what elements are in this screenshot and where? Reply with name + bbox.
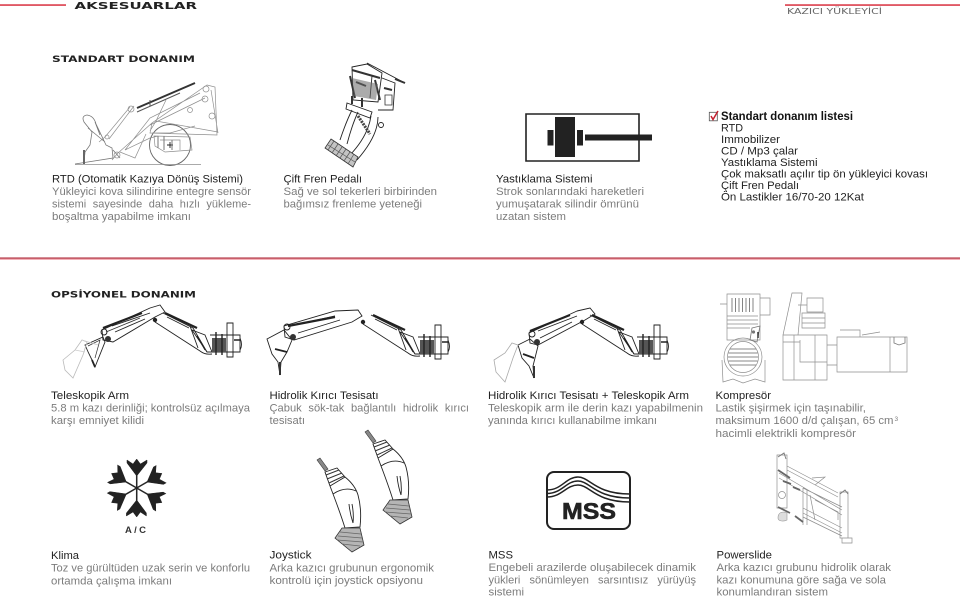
text: RTD bbox=[52, 174, 251, 223]
heading: standard equipment: STANDART DONANIM bbox=[52, 55, 195, 65]
text: cushioning system bbox=[496, 174, 644, 223]
text: breaker plus telescopic arm: Hidrolik Kırıcı Tesisatı + Teleskopik Arm bbox=[488, 390, 689, 402]
text: double brake pedal: Çift Fren Pedalı bbox=[284, 174, 362, 186]
list: standard equipment: RTD bbox=[721, 122, 743, 134]
icon: RTD loader arm drawing bbox=[75, 83, 218, 166]
text: air conditioning bbox=[51, 550, 250, 587]
text: RTD: sistemi sayesinde daha hızlı yükleme- bbox=[52, 198, 251, 210]
heading: optional equipment: OPSİYONEL DONANIM bbox=[51, 290, 196, 300]
text: compressor: Kompresör bbox=[716, 390, 771, 402]
header: left red rule and page title: AKSESUARLAR bbox=[74, 1, 197, 12]
text: cushioning system: Strok sonlarındaki hareketleri bbox=[496, 186, 644, 198]
text: powerslide bbox=[716, 550, 892, 598]
text: MSS: MSS bbox=[488, 550, 513, 562]
text: MSS bbox=[488, 550, 697, 598]
text: double brake pedal: bağımsız frenleme yeteneği bbox=[284, 198, 422, 210]
text: powerslide: Arka kazıcı grubunu hidrolik olarak bbox=[716, 562, 892, 574]
illustration: breaker plus telescopic arm bbox=[494, 308, 668, 382]
illustration: powerslide bbox=[777, 453, 852, 543]
text: compressor: hacimli elektrikli kompresör bbox=[716, 428, 856, 440]
text: telescopic arm bbox=[51, 390, 251, 427]
icon: MSS logo bbox=[547, 472, 630, 529]
text: joystick: kontrolü için joystick opsiyonu bbox=[270, 575, 423, 587]
text: breaker plus telescopic arm: yanında kırıcı kullanabilme imkanı bbox=[488, 415, 657, 427]
text: RTD: Yükleyici kova silindirine entegre sensör bbox=[52, 186, 251, 198]
header: right red rule and section name: KAZICI YÜKLEYİCİ bbox=[787, 6, 882, 16]
text: air conditioning: Klima bbox=[51, 550, 80, 562]
illustration: telescopic arm bbox=[63, 305, 242, 378]
text: breaker plus telescopic arm bbox=[488, 390, 703, 427]
illustration: compressor bbox=[720, 293, 907, 383]
list: standard equipment: Çok maksatlı açılır tip ön yükleyici kovası bbox=[721, 168, 928, 180]
text: compressor bbox=[716, 390, 898, 440]
text: hydraulic breaker line bbox=[270, 390, 469, 427]
icon: red checkbox bbox=[709, 111, 718, 121]
text: cushioning system: uzatan sistem bbox=[496, 211, 566, 223]
text: RTD: RTD (Otomatik Kazıya Dönüş Sistemi) bbox=[52, 174, 243, 186]
list: standard equipment: Çift Fren Pedalı bbox=[721, 180, 799, 192]
list: standard equipment: Standart donanım listesi bbox=[721, 111, 853, 123]
text: hydraulic breaker line: Çabuk sök-tak bağlantılı hidrolik kırıcı bbox=[270, 403, 469, 415]
text: compressor: Lastik şişirmek için taşınabilir, bbox=[716, 403, 866, 415]
section divider: red rule bbox=[0, 258, 960, 260]
text: breaker plus telescopic arm: Teleskopik arm ile derin kazı yapabilmenin bbox=[488, 403, 703, 415]
text: MSS: yükleri sönümleyen sarsıntısız yürüyüş bbox=[488, 574, 696, 586]
text: hydraulic breaker line: tesisatı bbox=[270, 415, 305, 427]
icon: air conditioning snowflake bbox=[106, 459, 167, 536]
illustration: hydraulic breaker line bbox=[267, 310, 450, 375]
text: air conditioning: Toz ve gürültüden uzak serin ve konforlu bbox=[51, 563, 250, 575]
text: powerslide: kazı konumuna göre sağa ve sola bbox=[716, 574, 887, 586]
text: telescopic arm: 5.8 m kazı derinliği; kontrolsüz açılmaya bbox=[51, 403, 251, 415]
text: joystick: Joystick bbox=[270, 550, 312, 562]
icon: double brake pedal bbox=[325, 63, 405, 167]
text: compressor: maksimum 1600 d/d çalışan, 65 cm bbox=[716, 415, 894, 427]
text: joystick: Arka kazıcı grubunun ergonomik bbox=[270, 562, 435, 574]
list: standard equipment bbox=[721, 111, 928, 203]
icon: cushioning cylinder bbox=[526, 114, 652, 161]
text: powerslide: Powerslide bbox=[716, 550, 772, 562]
text: compressor: 3 bbox=[894, 416, 898, 423]
text: RTD: boşaltma yapabilme imkanı bbox=[52, 211, 191, 223]
icon: MSS logo: MSS bbox=[562, 498, 616, 524]
icon: two joysticks bbox=[317, 430, 412, 552]
text: telescopic arm: Teleskopik Arm bbox=[51, 390, 129, 402]
text: double brake pedal bbox=[284, 174, 437, 210]
text: joystick bbox=[270, 550, 435, 587]
text: telescopic arm: karşı emniyet kilidi bbox=[51, 415, 144, 427]
text: double brake pedal: Sağ ve sol tekerleri birbirinden bbox=[284, 186, 437, 198]
list: standard equipment: Ön Lastikler 16/70-20 12Kat bbox=[721, 191, 864, 203]
list: standard equipment: Yastıklama Sistemi bbox=[721, 157, 818, 169]
text: MSS: Engebeli arazilerde oluşabilecek dinamik bbox=[488, 562, 697, 574]
list: standard equipment: Immobilizer bbox=[721, 134, 780, 146]
text: air conditioning: ortamda çalışma imkanı bbox=[51, 575, 172, 587]
list: standard equipment: CD / Mp3 çalar bbox=[721, 145, 798, 157]
text: hydraulic breaker line: Hidrolik Kırıcı Tesisatı bbox=[270, 390, 378, 402]
text: cushioning system: Yastıklama Sistemi bbox=[496, 174, 592, 186]
text: cushioning system: yumuşatarak silindir ömrünü bbox=[496, 198, 639, 210]
icon: air conditioning snowflake: A/C bbox=[125, 525, 146, 536]
